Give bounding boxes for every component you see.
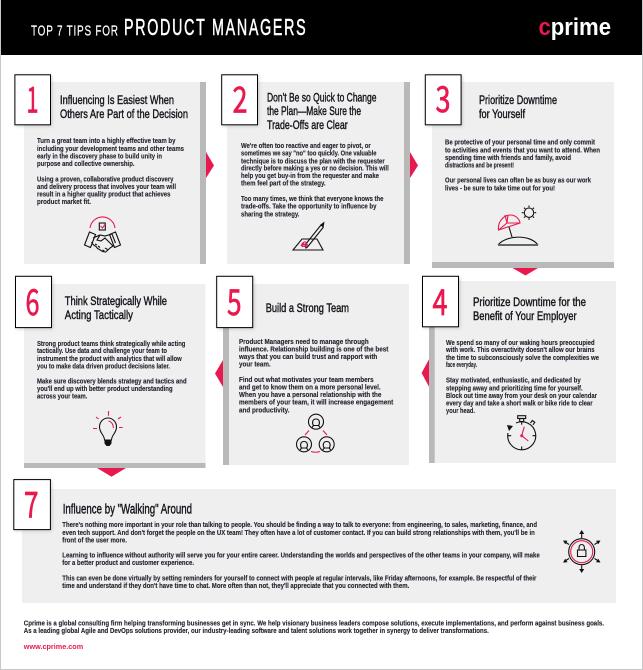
panel 5: build a strong team [217, 274, 409, 465]
body text 4: every day and take a short walk or bike ride to clear [446, 398, 593, 407]
body text 5: and productivity. [239, 406, 290, 415]
logo: cprime: cprime [538, 14, 611, 41]
heading 2: the Plan—Make Sure the [267, 104, 361, 118]
body text 3: Be protective of your personal time and only commit [445, 138, 595, 147]
title: top 7 tips for product managers: PRODUCT MANAGERS [124, 16, 306, 41]
body text 5: ways that you can build trust and rapport with [238, 352, 378, 361]
footer website link: www.cprime.com [23, 642, 83, 651]
body text 4: Stay motivated, enthusiastic, and dedicated by [446, 376, 581, 385]
heading 6 [65, 294, 167, 322]
icon: stopwatch [507, 416, 536, 450]
body text 3: lives - be sure to take time out for you! [445, 183, 555, 192]
body text 7: This can even be done virtually by setting reminders for yourself to connect with people at regular intervals, like Friday afternoons, for example. Be respectful of their [62, 574, 536, 583]
body text 4: with work. This overactivity doesn't allow our brains [445, 345, 595, 354]
body text 2: Too many times, we think that everyone knows the [241, 194, 383, 203]
icon: three connected people [296, 414, 334, 452]
footer company description [24, 619, 604, 635]
body text 5: influence. Relationship building is one of the best [239, 345, 389, 354]
heading 4: Prioritize Downtime for the [473, 295, 586, 309]
body text 3: Our personal lives can often be as busy as our work [445, 176, 592, 185]
number box 1 [15, 72, 50, 125]
arrow: 5 to 6 [215, 360, 223, 387]
body text 4: stepping away and prioritizing time for yourself. [446, 383, 583, 392]
body text 6: Make sure discovery blends strategy and tactics and [37, 377, 187, 386]
body text 6: across your team. [37, 392, 87, 401]
body text 1: product market fit. [37, 197, 91, 206]
number box 7 [14, 476, 50, 530]
body text 2: sharing the strategy. [241, 210, 299, 219]
arrow: 6 to 7 [97, 468, 126, 477]
number box 4 [422, 274, 458, 327]
body text 5: your team. [239, 360, 271, 369]
body text 4: We spend so many of our waking hours preoccupied [446, 338, 595, 347]
body text 1: Using a proven, collaborative product discovery [37, 175, 174, 184]
body text 7: Learning to influence without authority will serve you for your entire career. Understanding the worlds and perspectives of the other teams in your company, will make [62, 551, 540, 560]
heading 3 [479, 93, 557, 121]
body text 3: to activities and events that you want to attend. When [445, 145, 600, 154]
body text 2: directly before making a yes or no decision. This will [241, 164, 389, 173]
header banner [1, 0, 642, 55]
panel 3: prioritize downtime for yourself [425, 71, 614, 268]
panel 6: think strategically [16, 274, 206, 468]
body text 7: There's nothing more important in your role than talking to people. You should be finding a way to talk to everyone: from engineering, to sales, marketing, finance, and [62, 520, 537, 529]
body text 5: When you have a personal relationship with the [239, 390, 381, 399]
body text 1: purpose and collective ownership. [37, 159, 134, 168]
icon: beach umbrella and sun [498, 206, 538, 246]
body text 1: including your development teams and other teams [37, 144, 184, 153]
panel 7: influence by walking around [14, 476, 616, 603]
icon: light bulb [93, 411, 123, 446]
body text 6: you to make data driven product decisions later. [37, 361, 170, 370]
body text 6: tactically. Use data and challenge your team to [37, 346, 167, 355]
body text 3 [445, 138, 600, 192]
body text 5: members of your team, it will increase engagement [239, 398, 394, 407]
number box 1: 1 [26, 72, 38, 124]
panel 2: don't change the plan [222, 72, 410, 264]
body text 5: Find out what motivates your team members [239, 375, 374, 384]
body text 6: instrument the product with analytics that will allow [37, 354, 182, 363]
body text 7: even tech support. And don't forget the people on the UX team! They often have a lot of customer contact. If you can build strong relationships with them, you'll be in [62, 528, 535, 537]
number box 6 [16, 274, 52, 328]
body text 7 [62, 520, 540, 590]
body text 4: face everyday. [446, 360, 477, 369]
number box 5: 5 [227, 274, 242, 326]
number box 6: 6 [26, 274, 40, 326]
heading 1 [60, 93, 188, 121]
body text 2: sometimes we say "no" too quickly. One valuable [241, 149, 376, 158]
heading 3: for Yourself [479, 107, 525, 121]
number box 7: 7 [24, 476, 38, 528]
icon: handshake with checkbox [84, 217, 120, 252]
number box 5 [217, 274, 253, 328]
body text 3: spending time with friends and family, avoid [445, 153, 571, 162]
number box 4: 4 [432, 274, 448, 326]
body text 4: the time to subconsciously solve the complexities we [446, 353, 599, 362]
body text 2: We're often too reactive and eager to pivot, or [241, 141, 371, 150]
body text 2: help you get buy-in from the requester and make [241, 171, 379, 180]
arrow: 4 to 5 [422, 359, 429, 387]
heading 3: Prioritize Downtime [479, 93, 557, 107]
body text 4: your head. [446, 406, 475, 415]
icon: pencil signing paper [293, 222, 324, 250]
heading 6: Acting Tactically [65, 308, 134, 322]
heading 1: Others Are Part of the Decision [60, 107, 188, 121]
body text 7: front of the user more. [62, 536, 127, 545]
body text 6 [37, 339, 187, 401]
body text 6: you'll end up with better product understanding [37, 384, 173, 393]
number box 3: 3 [436, 71, 450, 123]
heading 4: Benefit of Your Employer [473, 309, 577, 323]
title: top 7 tips for product managers [31, 16, 306, 41]
body text 1: Turn a great team into a highly effective team by [37, 136, 176, 145]
heading 2: Trade-Offs are Clear [267, 118, 348, 132]
body text 7: time and understand if they don't have time to chat. More often than not, they'll appreciate that you connected with them. [62, 581, 409, 590]
heading 2: Don't Be so Quick to Change [267, 91, 377, 105]
arrow: 1 to 2 [206, 152, 214, 178]
heading 5: Build a Strong Team [266, 301, 349, 315]
number box 2: 2 [232, 72, 248, 124]
panel 1: influencing [15, 72, 206, 264]
title: top 7 tips for product managers: TOP 7 TIPS FOR [31, 23, 118, 39]
body text 1: result in a higher quality product that achieves [37, 190, 170, 199]
body text 6: Strong product teams think strategically while acting [37, 339, 186, 348]
body text 5: and get to know them on a more personal level. [239, 383, 381, 392]
body text 7: for a better product and customer experience. [62, 558, 194, 567]
body text 2: trade-offs. Take the opportunity to influence by [241, 202, 377, 211]
heading 2 [267, 91, 377, 132]
body text 1 [37, 136, 184, 206]
arrow: 2 to 3 [410, 152, 418, 178]
body text 1: and delivery process that involves your team will [37, 182, 176, 191]
body text 5: Product Managers need to manage through [239, 337, 369, 346]
body text 2 [241, 141, 389, 219]
body text 1: early in the discovery phase to build unity in [37, 152, 162, 161]
arrow: 3 to 4 [512, 268, 538, 276]
heading 1: Influencing Is Easiest When [60, 93, 174, 107]
panel 4: downtime for employer [422, 274, 616, 463]
body text 2: technique is to discuss the plan with the requester [241, 156, 385, 165]
body text 4 [445, 338, 599, 415]
footer company description: As a leading global Agile and DevOps solutions provider, our industry-leading software and talent solutions work together in synergy to deliver transformations. [24, 626, 489, 635]
heading 6: Think Strategically While [65, 294, 167, 308]
number box 3 [425, 71, 461, 125]
number box 2 [222, 72, 258, 125]
icon: person radiating influence [563, 530, 600, 573]
body text 5 [238, 337, 394, 415]
body text 3: distractions and be present! [445, 161, 514, 170]
heading 4 [473, 295, 586, 323]
heading 7: Influence by "Walking" Around [63, 502, 192, 517]
body text 2: them feel part of the strategy. [241, 179, 326, 188]
body text 4: Block out time away from your desk on your calendar [446, 391, 597, 400]
